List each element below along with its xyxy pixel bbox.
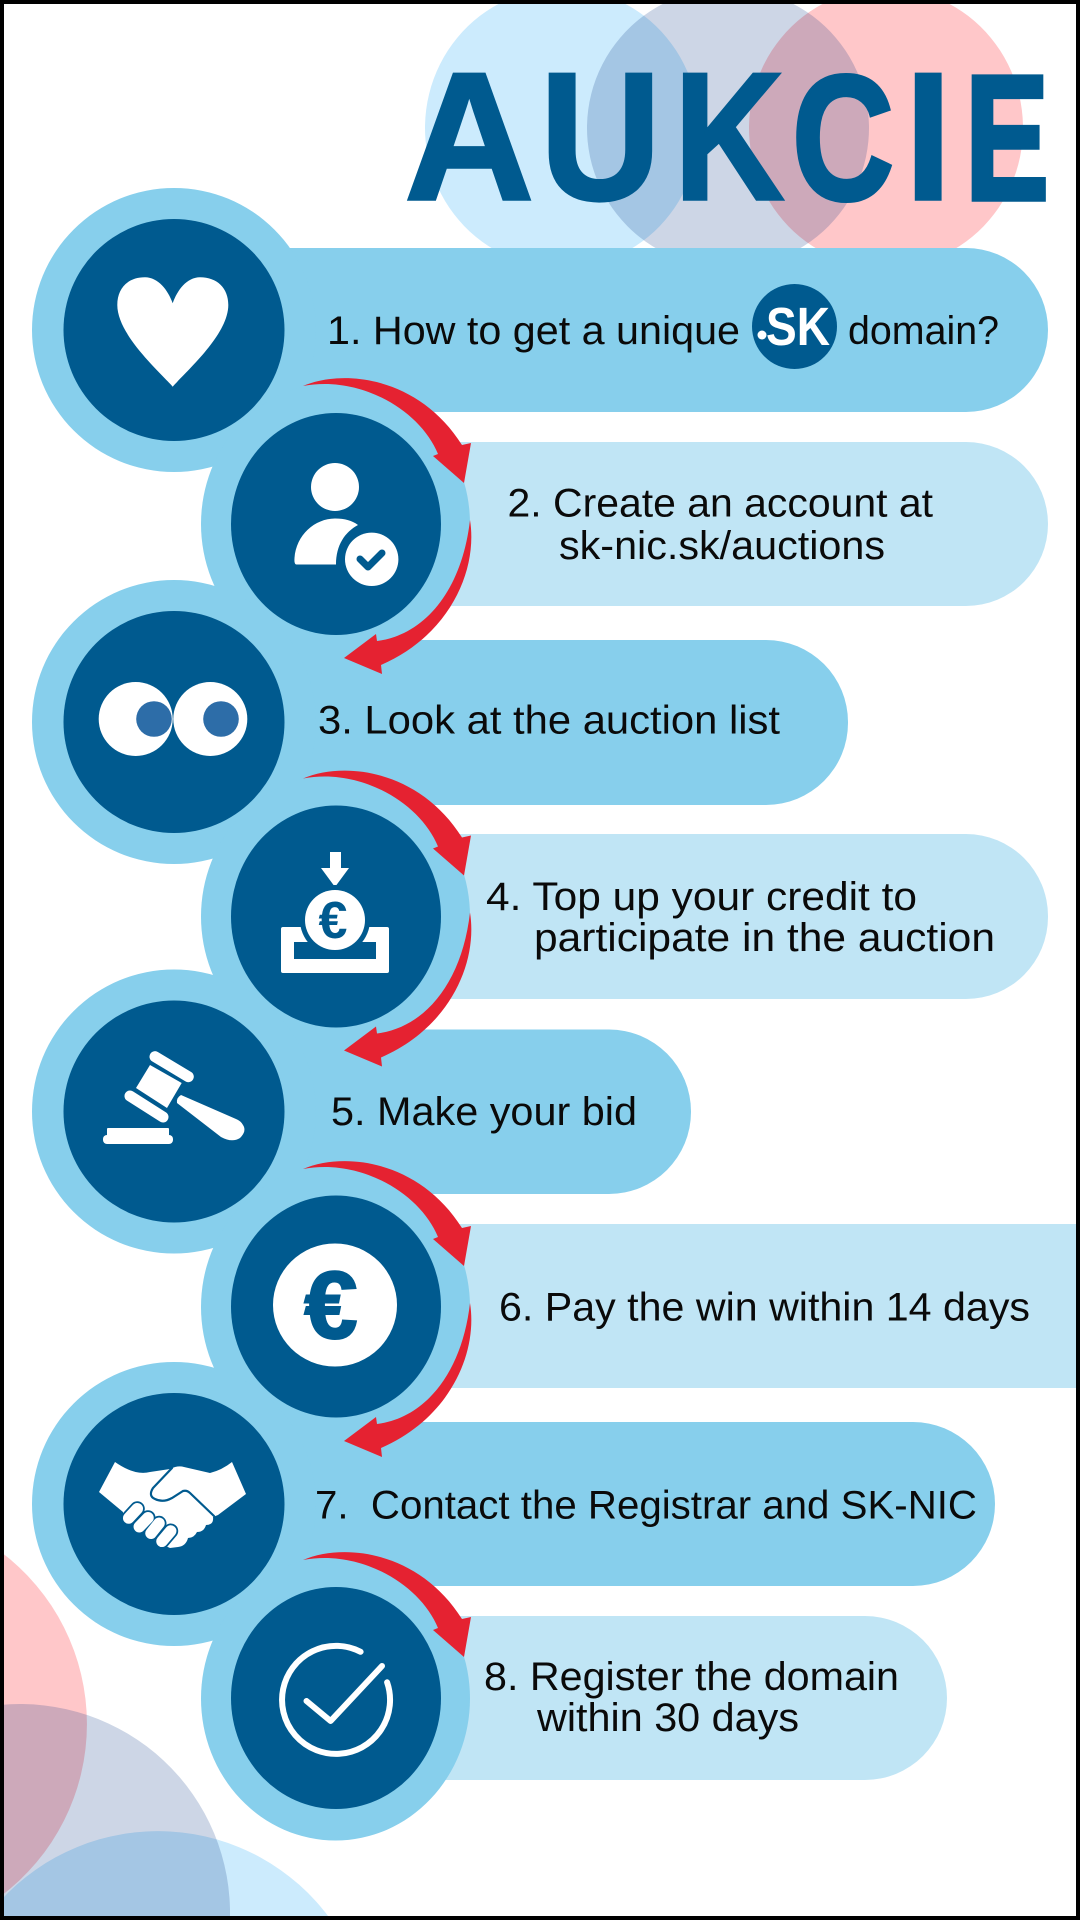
background circles: bottom left: [0, 1551, 331, 1920]
icon: eyes: [99, 682, 247, 756]
step 2: [201, 382, 1048, 666]
arrow: step 1 to 2: [303, 378, 471, 483]
arrow: step 7 to 8: [303, 1552, 471, 1657]
icon: euro coin: [273, 1244, 397, 1366]
step 2 text: [508, 482, 933, 568]
icon: user with check: [294, 463, 398, 586]
icon: euro deposit: [281, 852, 389, 973]
step 8 text: within 30 days: [536, 1696, 799, 1740]
step 1 text before logo: 1. How to get a unique: [327, 309, 740, 353]
step 6: [201, 1165, 1076, 1449]
arrow: step 5 to 6: [303, 1161, 471, 1266]
icon: check circle: [282, 1646, 390, 1754]
step 3 text: 3. Look at the auction list: [318, 698, 780, 742]
step 1 text after logo: domain?: [848, 309, 999, 353]
step 7 text: 7. Contact the Registrar and SK-NIC: [315, 1484, 977, 1528]
step 5 text: 5. Make your bid: [331, 1090, 637, 1134]
step 2 text: 2. Create an account at: [508, 482, 933, 526]
arrow: step 4 to 5: [344, 912, 471, 1066]
icon: euro coin: €: [304, 1252, 358, 1359]
step 4 text: [486, 875, 995, 960]
step 3: [32, 580, 848, 864]
icon: heart: [117, 277, 228, 387]
arrow: step 3 to 4: [303, 771, 471, 876]
arrow: step 2 to 3: [344, 520, 471, 674]
icon: .SK logo: SK: [766, 297, 830, 357]
step 8 text: 8. Register the domain: [484, 1655, 899, 1699]
step 4 text: participate in the auction: [534, 916, 995, 960]
icon: .SK logo: [752, 284, 837, 369]
step 4: [201, 774, 1048, 1058]
step 8: [201, 1556, 947, 1840]
icon: euro deposit: €: [319, 892, 347, 950]
step 6 text: 6. Pay the win within 14 days: [499, 1286, 1030, 1330]
title: U: [540, 34, 661, 238]
step 4 text: 4. Top up your credit to: [486, 875, 917, 919]
step 1: [32, 188, 1048, 472]
arrow: step 6 to 7: [344, 1303, 471, 1457]
title: K: [674, 34, 784, 238]
step 5: [32, 970, 691, 1254]
icon: gavel: [103, 1057, 244, 1144]
background circles: top: [425, 0, 1023, 268]
icon: handshake: [99, 1462, 246, 1548]
step 2 text: sk-nic.sk/auctions: [559, 524, 885, 568]
title: I: [905, 34, 951, 238]
title: A: [404, 34, 534, 238]
step 7: [32, 1362, 995, 1646]
title: C: [792, 38, 894, 237]
step 8 text: [484, 1655, 899, 1740]
